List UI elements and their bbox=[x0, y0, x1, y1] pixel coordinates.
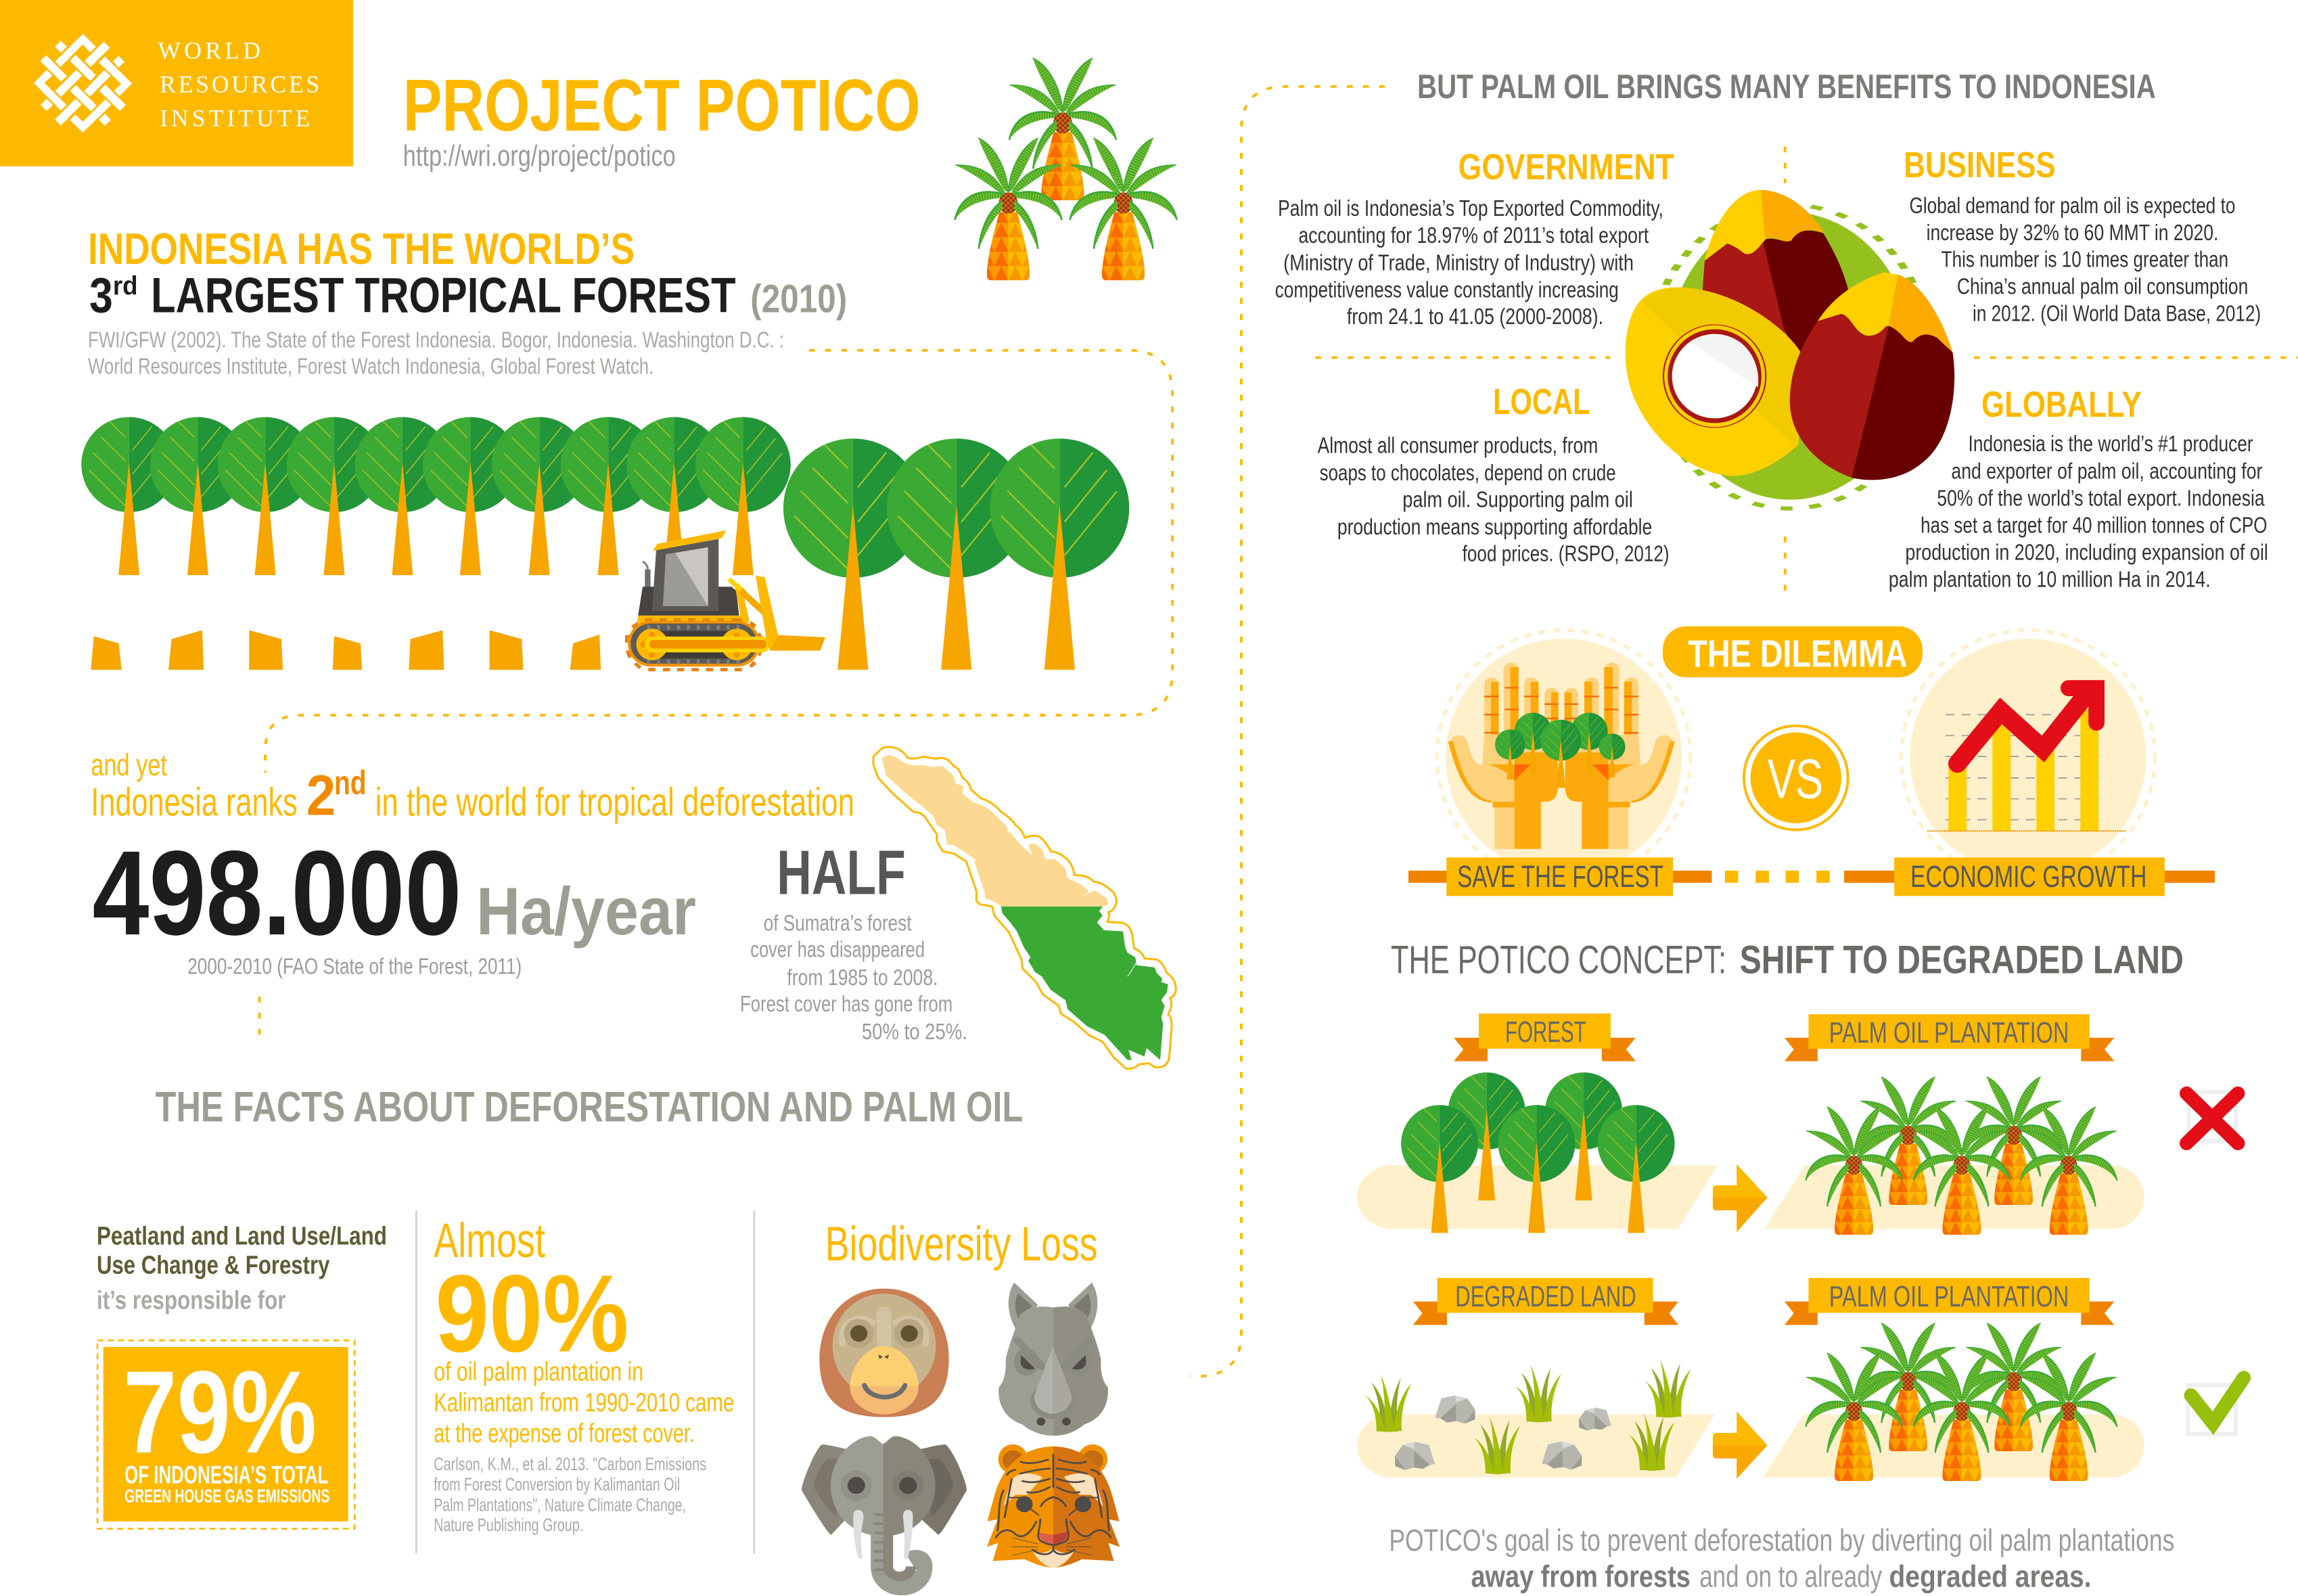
rocks bbox=[1395, 1396, 1611, 1470]
citation: from Forest Conversion by Kalimantan Oil bbox=[434, 1474, 680, 1495]
benefit: government bbox=[1275, 147, 1674, 329]
79 percent box: GREEN HOUSE GAS EMISSIONS bbox=[124, 1486, 329, 1507]
panel: save the forest illustration bbox=[1437, 630, 1691, 884]
heading: third largest tropical forest: (2010) bbox=[750, 277, 847, 321]
icon: orangutan bbox=[819, 1289, 949, 1417]
label: economic growth: ECONOMIC GROWTH bbox=[1910, 859, 2146, 894]
ribbon: palm oil plantation, lower bbox=[1785, 1278, 2114, 1325]
icon: trees in hands bbox=[1495, 713, 1626, 788]
benefit: business: BUSINESS bbox=[1904, 145, 2056, 185]
peatland heading: Peatland and Land Use/Land bbox=[97, 1222, 387, 1250]
heading: the potico concept bbox=[1391, 938, 2184, 982]
benefit: government: GOVERNMENT bbox=[1458, 147, 1674, 187]
illustration: forest trees bbox=[1401, 1072, 1675, 1233]
illustration: forest being cleared bbox=[81, 417, 1129, 671]
source note bbox=[88, 327, 784, 379]
citation: Nature Publishing Group. bbox=[434, 1514, 583, 1535]
icon: elephant bbox=[802, 1436, 967, 1584]
badge: the dilemma: THE DILEMMA bbox=[1688, 632, 1908, 675]
icons: endangered animals bbox=[802, 1283, 1120, 1584]
citation: Carlson, K.M., et al. 2013. "Carbon Emissions bbox=[434, 1453, 706, 1474]
benefit: globally bbox=[1889, 384, 2268, 593]
heading: the facts: THE FACTS ABOUT DEFORESTATION AND PALM OIL bbox=[156, 1083, 1023, 1131]
heading: third largest tropical forest: rd bbox=[113, 271, 138, 300]
deforestation stat: nd bbox=[334, 764, 367, 802]
benefit: local: food prices. (RSPO, 2012) bbox=[1463, 542, 1670, 567]
illustration: plantation on degraded land bbox=[1806, 1323, 2117, 1482]
panel: 90 percent fact: of oil palm plantation in bbox=[434, 1358, 643, 1387]
bars bbox=[1948, 710, 2098, 831]
panel: 90 percent fact: 90% bbox=[435, 1252, 628, 1375]
ground strips bbox=[1357, 1165, 2144, 1478]
benefit: local: palm oil. Supporting palm oil bbox=[1402, 488, 1633, 513]
ribbon: palm oil plantation, upper: PALM OIL PLANTATION bbox=[1829, 1017, 2069, 1049]
logo block bbox=[0, 0, 353, 166]
organisation name: WORLD bbox=[158, 37, 260, 64]
ribbon: forest bbox=[1454, 1013, 1636, 1061]
panel: emissions fact bbox=[97, 1222, 387, 1529]
map: Sumatra forest cover bbox=[873, 747, 1176, 1069]
panel: economic growth chart bbox=[1902, 630, 2155, 884]
benefit: business: increase by 32% to 60 MMT in 2020. bbox=[1927, 221, 2218, 246]
icon: open hands bbox=[1450, 663, 1672, 849]
peatland heading: Use Change & Forestry bbox=[97, 1252, 329, 1280]
benefit: local: soaps to chocolates, depend on crude bbox=[1320, 461, 1616, 486]
source note: World Resources Institute, Forest Watch Indonesia, Global Forest Watch. bbox=[88, 354, 653, 379]
icon: three oil palms bbox=[955, 58, 1177, 282]
benefit: local: LOCAL bbox=[1493, 382, 1590, 422]
project url: http://wri.org/project/potico bbox=[403, 140, 676, 173]
benefit: business bbox=[1904, 145, 2261, 326]
ribbon: degraded land: DEGRADED LAND bbox=[1455, 1281, 1636, 1313]
label: save the forest bbox=[1446, 857, 1673, 896]
title: PROJECT POTICO bbox=[403, 64, 921, 146]
badge: the dilemma bbox=[1663, 626, 1923, 677]
callout: half of Sumatra forest: cover has disappeared bbox=[750, 938, 925, 963]
79 percent box bbox=[97, 1340, 354, 1529]
benefit: local bbox=[1318, 382, 1670, 567]
small trees row bbox=[81, 417, 791, 575]
large trees bbox=[783, 438, 1129, 670]
ribbon: palm oil plantation, lower: PALM OIL PLANTATION bbox=[1829, 1281, 2069, 1313]
panel: 90 percent fact bbox=[434, 1214, 734, 1535]
icon: green check bbox=[2188, 1377, 2244, 1434]
panel: 90 percent fact: at the expense of forest cover. bbox=[434, 1419, 695, 1449]
grass tufts bbox=[1365, 1360, 1691, 1474]
label: economic growth bbox=[1894, 857, 2165, 896]
deforestation stat: Indonesia ranks bbox=[91, 781, 298, 825]
panel: 90 percent fact: Almost bbox=[434, 1214, 545, 1268]
badge: versus bbox=[1744, 726, 1848, 830]
dotted connector: facts to benefits bbox=[1190, 87, 1385, 1376]
tree stumps bbox=[91, 631, 601, 670]
arrow: forest to plantation bbox=[1713, 1164, 1768, 1232]
illustration: palm fruit bbox=[1626, 190, 1954, 509]
citation bbox=[434, 1453, 706, 1535]
label: save the forest: SAVE THE FOREST bbox=[1457, 859, 1663, 894]
organisation name bbox=[158, 37, 319, 132]
illustration: degraded land bbox=[1365, 1360, 1691, 1474]
peatland heading: it’s responsible for bbox=[97, 1287, 286, 1315]
callout: half of Sumatra forest: from 1985 to 2008. bbox=[787, 965, 938, 990]
ribbon: forest: FOREST bbox=[1505, 1016, 1586, 1049]
icon: rhino bbox=[998, 1283, 1108, 1436]
heading: third largest tropical forest: LARGEST TROPICAL FOREST bbox=[151, 267, 736, 323]
benefit: government: (Ministry of Trade, Ministry of Industry) with bbox=[1283, 250, 1634, 275]
heading: third largest tropical forest: INDONESIA HAS THE WORLD’S bbox=[88, 224, 635, 273]
benefit: government: from 24.1 to 41.05 (2000-2008). bbox=[1347, 304, 1603, 329]
remaining forest bbox=[1001, 907, 1168, 1060]
deforestation stat: 2000-2010 (FAO State of the Forest, 2011) bbox=[187, 955, 522, 980]
badge: versus: VS bbox=[1768, 748, 1823, 810]
callout: half of Sumatra forest: HALF bbox=[777, 838, 906, 908]
icon: red cross bbox=[2186, 1092, 2238, 1143]
benefit: globally: palm plantation to 10 million Ha in 2014. bbox=[1889, 568, 2211, 593]
heading: the potico concept: THE POTICO CONCEPT: bbox=[1391, 938, 1726, 982]
arrow: degraded land to plantation bbox=[1713, 1411, 1768, 1479]
heading: third largest tropical forest bbox=[88, 224, 847, 323]
79 percent box: 79% bbox=[123, 1346, 317, 1478]
callout: half of Sumatra forest bbox=[740, 838, 967, 1045]
heading: biodiversity loss: Biodiversity Loss bbox=[825, 1217, 1098, 1271]
cover lost bbox=[881, 755, 1108, 907]
front fruit bbox=[1790, 273, 1954, 480]
source note: FWI/GFW (2002). The State of the Forest Indonesia. Bogor, Indonesia. Washington D.C. : bbox=[88, 327, 784, 352]
benefit: local: production means supporting affordable bbox=[1337, 515, 1652, 540]
benefit: government: Palm oil is Indonesia’s Top Exported Commodity, bbox=[1278, 196, 1663, 221]
panel: 90 percent fact: Kalimantan from 1990-2010 came bbox=[434, 1388, 734, 1417]
callout: half of Sumatra forest: Forest cover has gone from bbox=[740, 992, 952, 1017]
heading: the potico concept: SHIFT TO DEGRADED LAND bbox=[1740, 938, 2184, 982]
closing statement bbox=[1389, 1523, 2174, 1594]
ring of green dashes bbox=[1649, 205, 1931, 509]
dotted connector: stat to facts bbox=[258, 997, 260, 1038]
79 percent box: OF INDONESIA’S TOTAL bbox=[124, 1461, 328, 1488]
top fruit bbox=[1703, 190, 1848, 363]
benefit: local: Almost all consumer products, from bbox=[1318, 433, 1598, 458]
benefit: globally: GLOBALLY bbox=[1981, 384, 2142, 425]
icon: tiger bbox=[987, 1444, 1120, 1568]
deforestation stat: 2 bbox=[306, 764, 336, 827]
deforestation stat: 498.000 bbox=[92, 825, 461, 960]
citation: Palm Plantations", Nature Climate Change, bbox=[434, 1495, 686, 1515]
benefit: government: competitiveness value constantly increasing bbox=[1275, 277, 1619, 302]
icon: woven WRI logo bbox=[34, 34, 132, 133]
deforestation stat: and yet bbox=[91, 748, 167, 782]
callout: half of Sumatra forest: of Sumatra’s forest bbox=[764, 911, 912, 936]
icon: bulldozer bbox=[625, 530, 825, 671]
closing statement: degraded areas. bbox=[1889, 1559, 2092, 1594]
organisation name: RESOURCES bbox=[160, 70, 319, 97]
illustration: plantation on forest land bbox=[1806, 1077, 2117, 1236]
closing statement: away from forests bbox=[1471, 1559, 1691, 1594]
deforestation stat bbox=[91, 748, 854, 980]
closing statement: and on to already bbox=[1699, 1559, 1882, 1594]
organisation name: INSTITUTE bbox=[160, 105, 310, 132]
ribbon: palm oil plantation, upper bbox=[1785, 1014, 2114, 1061]
red rising arrow bbox=[1958, 688, 2096, 764]
benefit: government: accounting for 18.97% of 2011’s total export bbox=[1298, 223, 1649, 248]
dotted connector: forest to deforestation bbox=[265, 350, 1172, 773]
deforestation stat: in the world for tropical deforestation bbox=[375, 781, 854, 825]
cut fruit bbox=[1626, 288, 1801, 476]
ribbon: degraded land bbox=[1413, 1278, 1678, 1325]
deforestation stat: Ha/year bbox=[476, 874, 696, 949]
label band: save the forest vs economic growth bbox=[1408, 857, 2215, 896]
heading: third largest tropical forest: 3 bbox=[89, 267, 113, 323]
callout: half of Sumatra forest: 50% to 25%. bbox=[862, 1020, 967, 1045]
peatland heading bbox=[97, 1222, 387, 1315]
